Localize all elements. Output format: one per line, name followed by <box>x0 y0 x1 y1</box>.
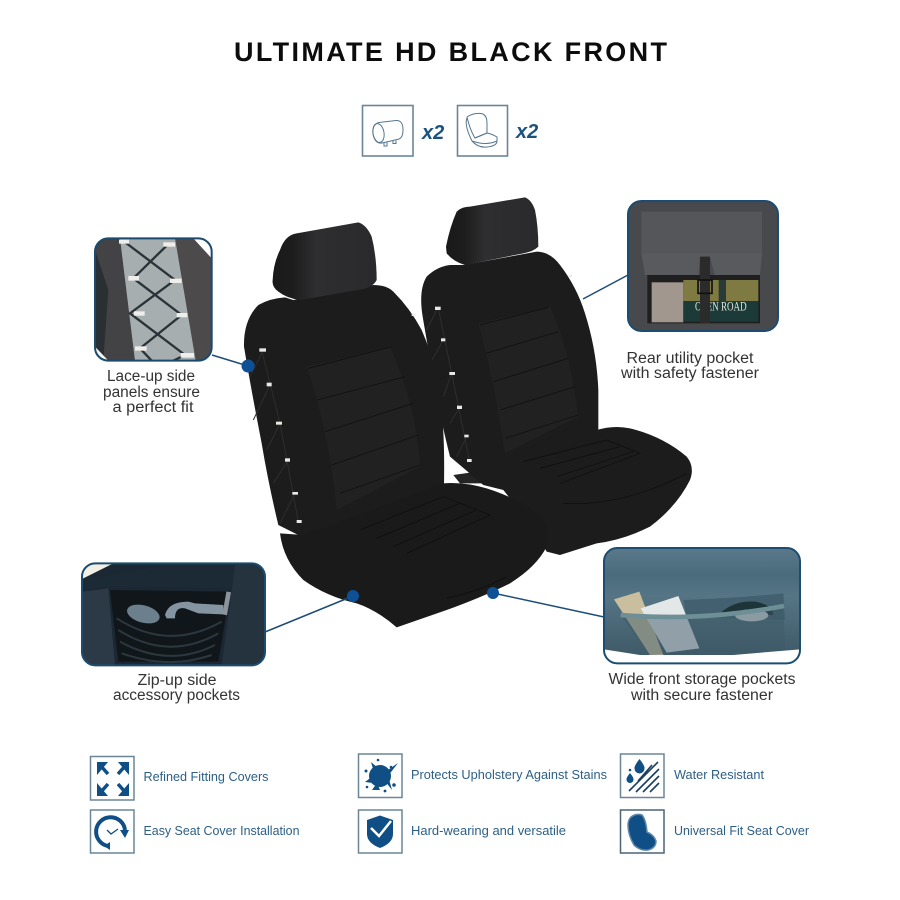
rear seat panel <box>478 307 578 453</box>
front seat panel <box>307 347 420 510</box>
rear seat backrest <box>421 252 598 475</box>
caption: with safety fastener <box>620 365 759 382</box>
rear seat cushion <box>468 427 692 555</box>
photo: rear pocket <box>628 201 778 331</box>
caption <box>103 368 200 416</box>
label: Refined Fitting Covers <box>144 769 269 784</box>
icon: splash <box>358 754 402 798</box>
callout: rear utility pocket <box>583 201 778 382</box>
caption: panels ensure <box>103 384 200 401</box>
caption: Wide front storage pockets <box>608 671 796 688</box>
caption: Rear utility pocket <box>626 350 754 367</box>
connector line and dot <box>265 590 359 632</box>
feature: hard-wearing and versatile <box>358 810 566 853</box>
feature: refined fitting covers <box>90 756 269 800</box>
contents: quantity icons <box>362 106 538 156</box>
callout: lace-up side panels <box>95 238 254 416</box>
front seat lacing and tabs <box>250 314 414 523</box>
icon: shield check <box>358 810 402 853</box>
icon: droplets on fabric <box>620 754 664 798</box>
feature: water resistant <box>620 754 764 798</box>
label: Hard-wearing and versatile <box>411 823 566 838</box>
caption: Lace-up side <box>107 368 195 385</box>
photo: zip pocket <box>82 563 265 665</box>
caption: with secure fastener <box>630 687 773 704</box>
caption: accessory pockets <box>113 687 240 704</box>
icon: seat silhouette <box>620 810 664 853</box>
quantity label: x2 <box>515 121 538 143</box>
front seat cushion <box>280 483 548 627</box>
label: Protects Upholstery Against Stains <box>411 767 607 782</box>
title: ULTIMATE HD BLACK FRONT <box>234 37 668 67</box>
icon: headrest cover <box>362 106 413 156</box>
connector line and dot <box>487 587 604 617</box>
photo: lace-up panel <box>95 238 212 361</box>
feature: easy seat cover installation <box>90 810 300 853</box>
caption: Zip-up side <box>138 672 216 689</box>
rear seat headrest <box>446 197 538 265</box>
callout: zip-up side pockets <box>82 563 359 704</box>
quantity label: x2 <box>421 122 444 144</box>
front seat headrest <box>273 222 377 300</box>
label: Universal Fit Seat Cover <box>674 823 810 838</box>
icon: seat cover <box>458 106 508 156</box>
callout: wide front storage pockets <box>487 548 800 704</box>
feature: protects against stains <box>358 754 607 798</box>
photo: wide pocket <box>604 548 800 663</box>
caption <box>608 671 796 704</box>
feature: universal fit seat cover <box>620 810 810 853</box>
label: Water Resistant <box>674 767 764 782</box>
rear seat lower bracket <box>453 473 483 483</box>
photo: rear pocket: OPEN ROAD <box>695 300 747 314</box>
seats illustration <box>244 197 692 627</box>
caption <box>620 350 759 382</box>
label: Easy Seat Cover Installation <box>144 823 300 838</box>
front seat backrest <box>244 285 444 538</box>
icon: clock arrow <box>90 810 134 853</box>
rear seat lacing and tabs <box>427 275 572 462</box>
caption <box>113 672 240 704</box>
connector line and dot <box>212 355 254 372</box>
connector line <box>583 275 628 299</box>
icon: four arrows <box>90 756 134 800</box>
caption: a perfect fit <box>112 399 194 416</box>
